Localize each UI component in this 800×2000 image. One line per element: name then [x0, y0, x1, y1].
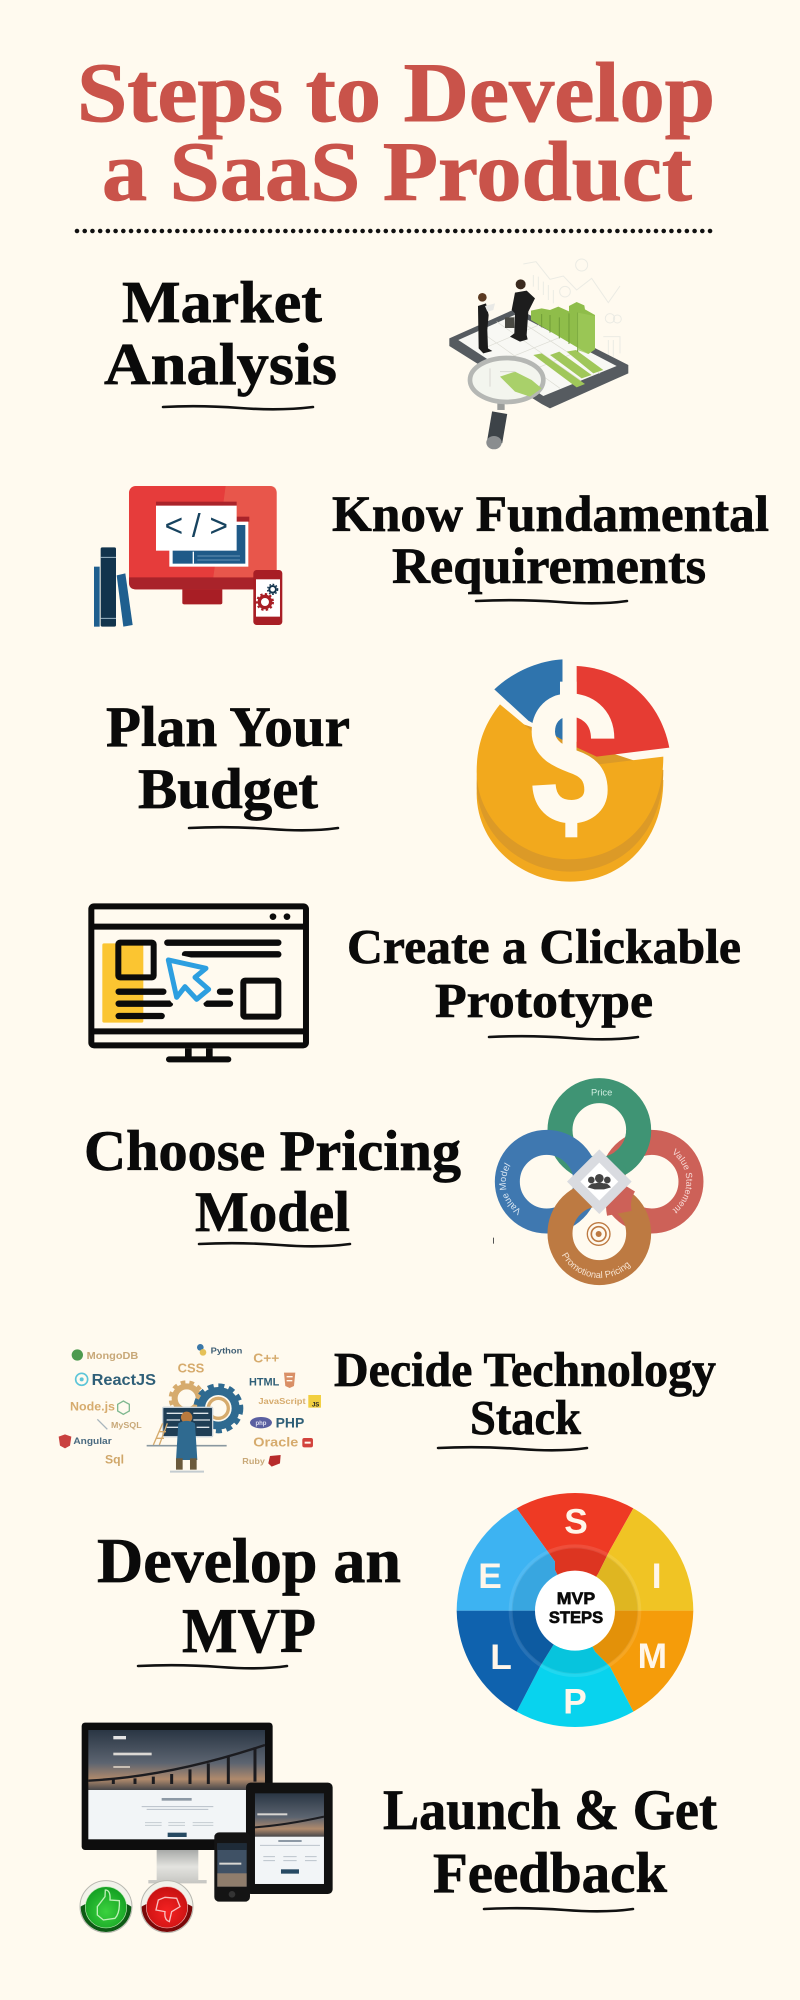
- icon: prototype monitor with cursor: [91, 906, 306, 1059]
- heading: decide technology stack: Decide Technology: [334, 1342, 716, 1397]
- heading: launch and get feedback: [383, 1779, 717, 1911]
- heading: know fundamental requirements: [332, 487, 769, 603]
- heading: choose pricing model: Choose Pricing: [84, 1120, 461, 1183]
- icon: four pricing rings: [493, 1078, 704, 1286]
- icon: technology logos with developer: CSS: [178, 1362, 204, 1376]
- ring labels: [499, 1087, 692, 1278]
- icon: responsive devices and thumbs: [80, 1723, 333, 1933]
- wheel labels: S: [564, 1502, 588, 1541]
- wheel labels: M: [638, 1637, 667, 1676]
- heading: choose pricing model: Model: [195, 1181, 350, 1244]
- person right: [505, 279, 535, 342]
- step 5: pricing model: [84, 1078, 704, 1286]
- wheel labels: [478, 1502, 667, 1721]
- icon: technology logos with developer: ReactJS: [92, 1372, 156, 1389]
- heading: develop an mvp: Develop an: [97, 1526, 401, 1596]
- heading: market analysis: Analysis: [104, 331, 337, 397]
- ring labels: Promotional Pricing: [562, 1252, 631, 1278]
- icon: dollar pie chart: [477, 659, 669, 882]
- step 3: plan your budget: [106, 659, 669, 882]
- icon: tablet with charts and magnifier: [449, 259, 628, 449]
- heading: create a clickable prototype: Prototype: [435, 973, 653, 1028]
- person left: [478, 293, 495, 353]
- heading: develop an mvp: MVP: [182, 1596, 316, 1666]
- icon: MVP steps wheel: [457, 1493, 693, 1727]
- icon: technology logos with developer: PHP: [276, 1415, 304, 1431]
- wheel labels: I: [652, 1557, 662, 1596]
- step 8: launch and feedback: [80, 1723, 717, 1933]
- step 6: technology stack: [59, 1342, 716, 1472]
- phone: [214, 1832, 250, 1902]
- icon: technology logos with developer: C++: [253, 1352, 279, 1366]
- heading: launch and get feedback: Feedback: [433, 1842, 667, 1905]
- centre diamond: [567, 1149, 632, 1214]
- gears: [171, 1382, 241, 1431]
- title: [77, 46, 715, 219]
- thumbs down button: [141, 1881, 193, 1933]
- heading: market analysis: Market: [122, 269, 322, 335]
- heading: decide technology stack: Stack: [470, 1390, 582, 1445]
- icon: technology logos with developer: Oracle: [253, 1436, 298, 1450]
- icon: technology logos with developer: MySQL: [111, 1420, 142, 1430]
- wheel labels: E: [478, 1557, 502, 1596]
- icon: technology logos with developer: Ruby: [242, 1456, 265, 1466]
- icon: technology logos with developer: JS: [312, 1402, 319, 1408]
- ring labels: Value Model: [499, 1162, 520, 1216]
- heading: create a clickable prototype: [347, 919, 741, 1039]
- step 2: fundamental requirements: [94, 486, 769, 627]
- heading: market analysis: [104, 269, 337, 409]
- wheel labels: L: [490, 1638, 512, 1677]
- icon: monitor with code, books and phone: < / >: [165, 508, 228, 544]
- icon: technology logos with developer: [59, 1344, 321, 1472]
- cursor: [168, 960, 209, 999]
- magnifier: [470, 358, 543, 449]
- ring labels: Price: [591, 1087, 612, 1097]
- heading: develop an mvp: [97, 1526, 401, 1668]
- heading: choose pricing model: [84, 1120, 461, 1246]
- heading: launch and get feedback: Launch & Get: [383, 1779, 717, 1842]
- wheel labels: P: [563, 1682, 587, 1721]
- desktop monitor: [82, 1723, 273, 1883]
- heading: plan your budget: [106, 696, 350, 830]
- step 7: develop an MVP: [97, 1493, 693, 1727]
- heading: plan your budget: Budget: [138, 758, 318, 821]
- dollar sign: [543, 660, 603, 837]
- icon: technology logos with developer: HTML: [249, 1377, 280, 1389]
- step 4: clickable prototype: [91, 906, 741, 1059]
- icon: technology logos with developer: MongoDB: [87, 1351, 138, 1362]
- heading: plan your budget: Plan Your: [106, 696, 350, 759]
- ring labels: Value Statement: [672, 1148, 692, 1214]
- icon: technology logos with developer: php: [255, 1421, 267, 1427]
- icon: technology logos with developer: Node.js: [70, 1400, 115, 1414]
- phone: [253, 570, 282, 625]
- step 1: market analysis: [104, 259, 628, 449]
- heading: know fundamental requirements: Requirements: [392, 539, 706, 595]
- heading: know fundamental requirements: Know Fundamental: [332, 487, 769, 543]
- icon: technology logos with developer: Angular: [73, 1436, 112, 1446]
- icon: monitor with code, books and phone: [94, 486, 282, 627]
- wheel labels: MVP: [557, 1589, 595, 1608]
- tablet: [246, 1783, 333, 1894]
- heading: create a clickable prototype: Create a Clickable: [347, 919, 741, 974]
- books: [94, 547, 133, 627]
- title: a SaaS Product: [102, 125, 692, 219]
- title: Steps to Develop: [77, 46, 715, 140]
- thumbs up button: [80, 1881, 132, 1933]
- icon: technology logos with developer: JavaScript: [258, 1397, 306, 1406]
- icon: technology logos with developer: Sql: [105, 1452, 124, 1466]
- heading: decide technology stack: [334, 1342, 716, 1450]
- icon: technology logos with developer: Python: [211, 1345, 242, 1355]
- developer at desk: [147, 1407, 227, 1472]
- wheel labels: STEPS: [549, 1608, 603, 1627]
